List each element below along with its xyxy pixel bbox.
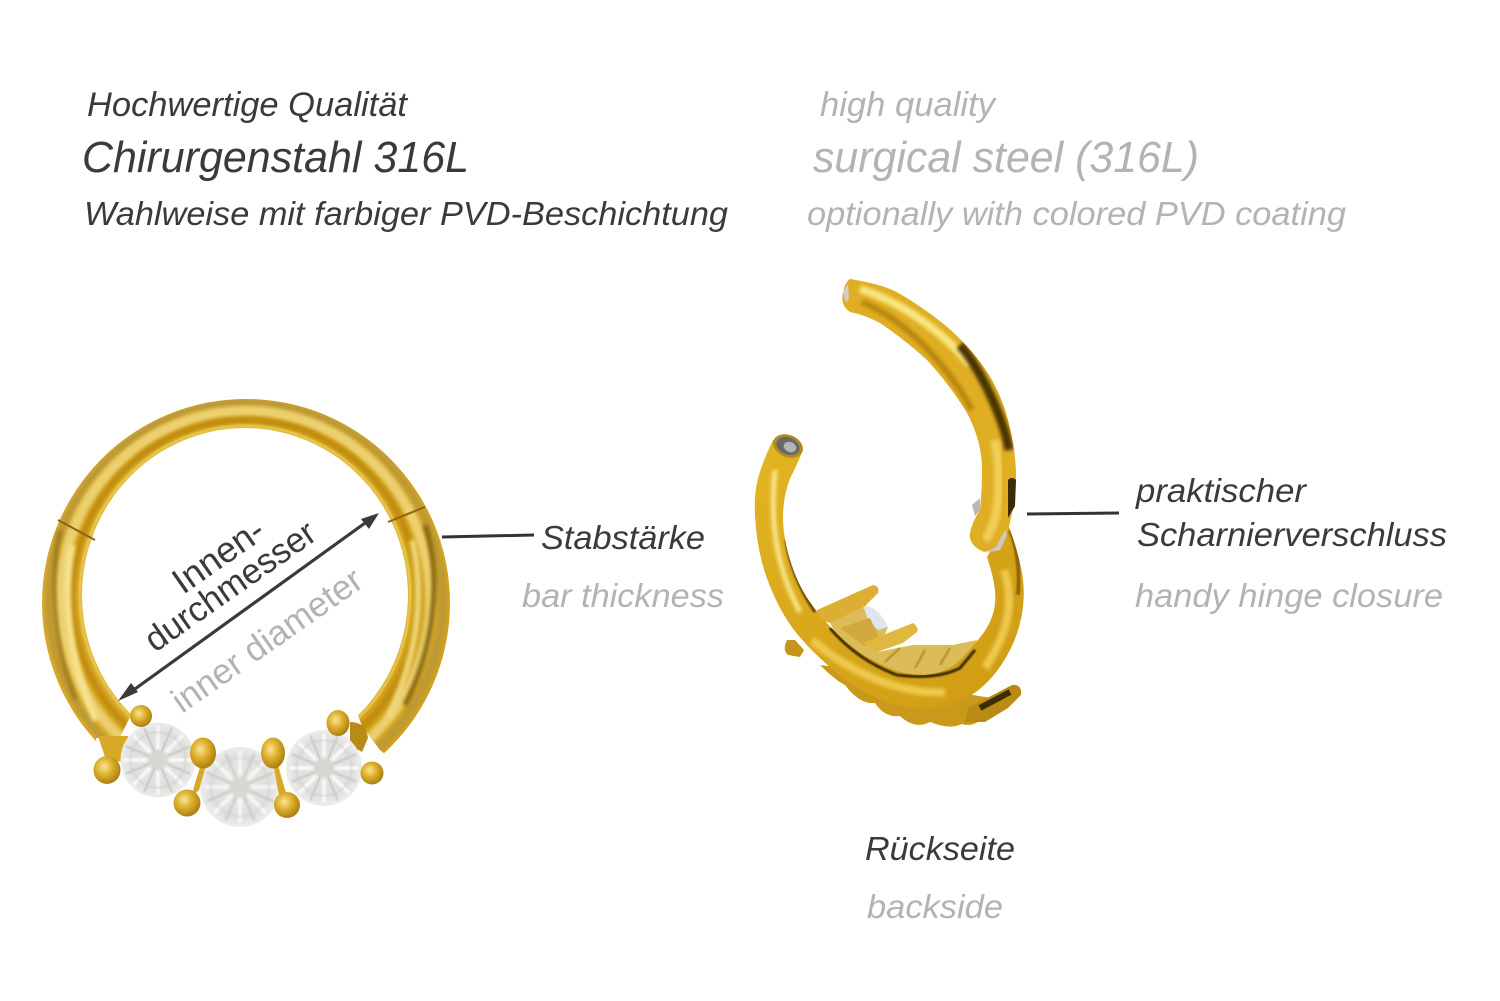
upper arc — [842, 279, 1016, 552]
text: Wahlweise mit farbiger PVD-Beschichtung: Wahlweise mit farbiger PVD-Beschichtung — [84, 196, 728, 233]
open tip of lower arc — [770, 430, 806, 462]
label: Innen-durchmesser: Innen- — [164, 509, 272, 602]
lower arc shading — [773, 470, 1019, 692]
label: handy hinge closure: handy hinge closure — [1135, 577, 1443, 614]
infographic canvas — [42, 91, 1446, 918]
label: backside: backside — [867, 888, 1003, 925]
pin at upper tip — [843, 284, 849, 303]
label: Rückseite: Rückseite — [865, 830, 1015, 867]
dimension arrow: inner diameter — [118, 513, 379, 701]
upper arc shading — [860, 289, 1009, 540]
rear setting with gem — [817, 585, 977, 680]
gem right — [286, 730, 362, 806]
label: inner diameter: inner diameter — [164, 560, 370, 721]
heading: Hochwertige Qualität: Hochwertige Qualität — [87, 86, 408, 124]
front bumps and prongs — [785, 640, 1021, 727]
label: bar thickness: bar thickness — [522, 577, 724, 614]
heading: surgical steel (316L): surgical steel (316L) — [813, 134, 1199, 182]
label: Stabstärke: Stabstärke — [541, 519, 705, 556]
hinge slot — [1008, 478, 1016, 518]
gem centre — [200, 747, 280, 827]
label: Innen-durchmesser: durchmesser — [137, 513, 324, 660]
ring band — [42, 399, 450, 754]
leader line: bar thickness — [442, 535, 534, 537]
text: optionally with colored PVD coating: optionally with colored PVD coating — [807, 196, 1346, 233]
label: praktischer Scharnierverschluss — [1135, 472, 1447, 553]
gem left — [120, 722, 196, 798]
dark collar behind right gem — [350, 722, 368, 752]
heading block: German — [82, 86, 728, 233]
back view of open hinged ring — [755, 279, 1024, 727]
ring seams — [58, 507, 425, 540]
leader line: hinge closure — [1027, 513, 1119, 514]
label: praktischer Scharnierverschluss: Scharnierverschluss — [1137, 516, 1447, 553]
hinge pin — [985, 530, 1007, 553]
heading: Chirurgenstahl 316L: Chirurgenstahl 316L — [82, 134, 469, 182]
front view of gold ring with three gems — [42, 399, 450, 827]
gem prongs — [94, 705, 384, 818]
lower arc — [755, 440, 1024, 709]
heading block: English — [807, 86, 1346, 233]
heading: high quality: high quality — [820, 86, 997, 124]
label: praktischer Scharnierverschluss: praktischer — [1135, 472, 1308, 509]
left collar behind gem — [98, 736, 128, 762]
